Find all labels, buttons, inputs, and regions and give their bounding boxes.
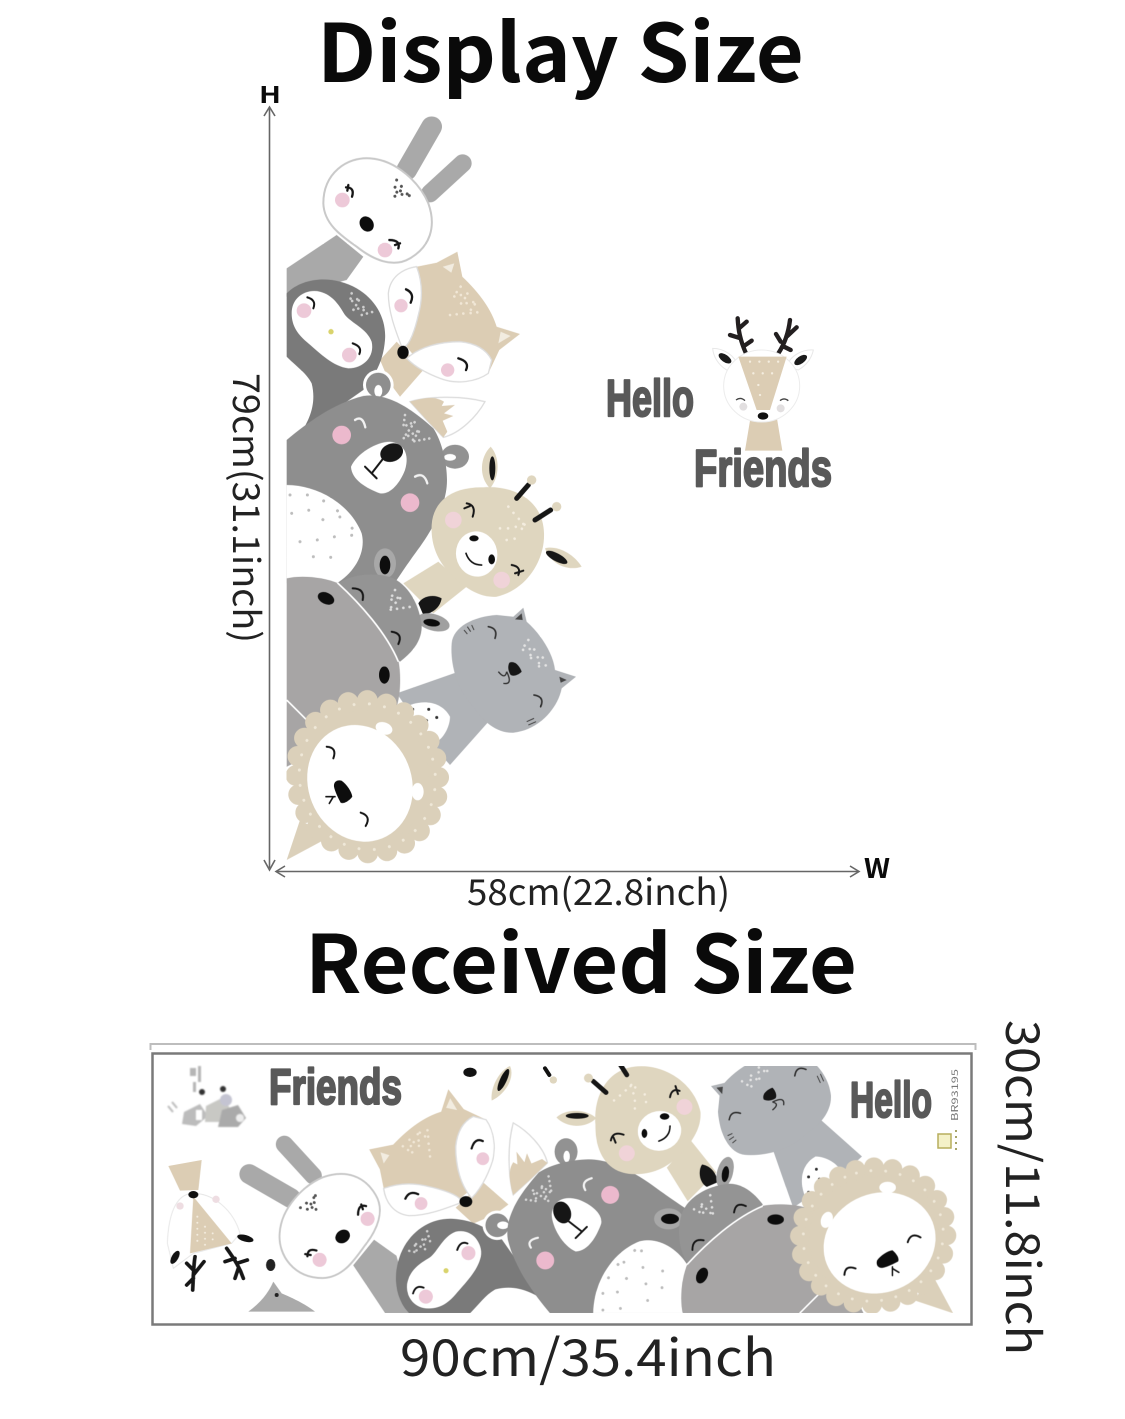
lion — [279, 684, 456, 869]
giraffe — [403, 447, 582, 613]
cat — [397, 608, 576, 765]
fox tail — [410, 397, 485, 437]
illustration: animal group, on sheet — [239, 1066, 956, 1313]
text: Hello on sheet: Hello — [850, 1072, 932, 1128]
deer neck — [745, 417, 782, 451]
deer ears — [713, 348, 813, 370]
text: Friends on sheet: Friends — [269, 1059, 402, 1115]
axis label H: H — [259, 76, 281, 110]
small hippo — [338, 548, 452, 662]
title: Received Size: Received Size — [305, 901, 857, 1017]
deer antlers piece — [187, 1248, 247, 1290]
fox — [380, 252, 520, 397]
width dimension label: 58cm(22.8inch) — [467, 864, 730, 916]
deer face — [736, 357, 788, 420]
illustration: spare deer on sheet — [167, 1066, 557, 1312]
icon: small yellow mark — [938, 1130, 956, 1152]
sticker sheet frame — [152, 1054, 972, 1324]
cut-out horn — [545, 1068, 557, 1084]
axis label W: W — [864, 847, 890, 886]
product code: BR93195 — [948, 1069, 961, 1121]
height axis arrow — [264, 107, 275, 870]
deer face piece — [168, 1191, 254, 1265]
dimension label: sheet height: 30cm/11.8inch — [992, 1020, 1061, 1355]
deer head piece — [167, 1193, 240, 1268]
width axis arrow — [276, 866, 859, 877]
illustration: deer — [713, 318, 813, 451]
bear — [287, 370, 469, 590]
illustration: thumbnail cluster — [168, 1066, 246, 1127]
deer neck piece — [168, 1160, 202, 1191]
cut-out leaf ear — [491, 1066, 511, 1101]
sheet backing line — [150, 1044, 976, 1050]
deer head — [724, 350, 800, 422]
small black shapes — [266, 1068, 477, 1297]
rabbit — [287, 127, 463, 297]
deer antlers — [730, 318, 797, 353]
height dimension label: 79cm(31.1inch) — [222, 373, 276, 643]
large hippo — [287, 577, 400, 767]
illustration: animal group, displayed — [279, 127, 582, 869]
dimension label: sheet width: 90cm/35.4inch — [400, 1317, 776, 1391]
text: Friends: Friends — [694, 440, 832, 498]
cut-out ear piece — [248, 1282, 315, 1312]
text: Hello: Hello — [606, 370, 694, 428]
penguin — [287, 279, 385, 437]
